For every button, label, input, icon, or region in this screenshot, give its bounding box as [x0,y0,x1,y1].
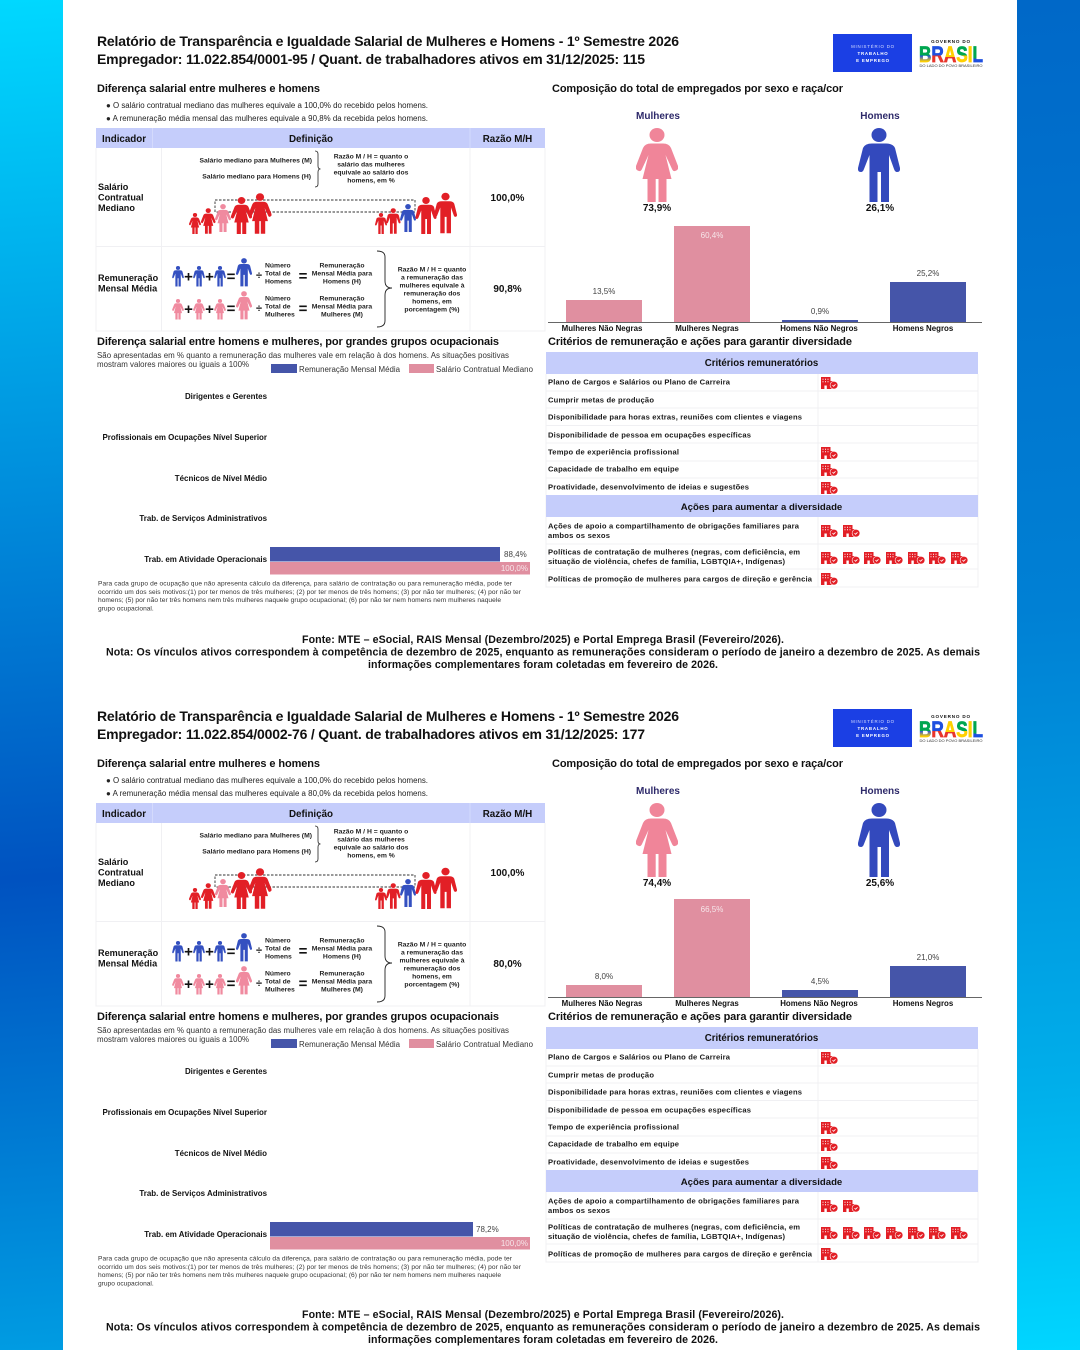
row: remuneração mensal média: Remuneração [320,938,364,944]
row: remuneração mensal média: Mulheres (M) [321,986,363,994]
legend: Remuneração Mensal Média [299,365,401,374]
title: Relatório de Transparência e Igualdade Salarial de Mulheres e Homens - 1º Semestre 2026 [97,708,679,724]
source note: Nota: Os vínculos ativos correspondem à competência de dezembro de 2025, enquanto as remunerações consideram o período de janeiro a dezembro de 2025. As demais [106,646,980,658]
table header: Razão M/H [483,809,532,820]
action rows [548,522,968,585]
heading: occupational groups: Diferença salarial entre homens e mulheres, por grandes grupos ocupacionais [97,336,499,348]
row: remuneração mensal média: Remuneração [320,262,364,270]
heading: occupational groups: Diferença salarial entre homens e mulheres, por grandes grupos ocupacionais [97,1011,499,1023]
row: remuneração mensal média: Homens [265,278,292,286]
panel: indicator table [96,803,545,1006]
table header [96,803,545,823]
source note [106,1309,980,1346]
footnote: homens; (5) por não ter três homens nem três mulheres naquele grupo ocupacional; (6) por não ter nem homens nem mulheres naquele [98,1272,501,1279]
row: remuneração mensal média: Razão M / H = quanto [398,941,466,948]
summary bullets: ● O salário contratual mediano das mulheres equivale a 100,0% do recebido pelos homens. [106,776,428,785]
panel: composition icons: Mulheres [636,111,680,122]
action rows: ambos os sexos [548,531,610,540]
bar chart: sex and race: Mulheres Negras [675,999,739,1008]
row: remuneração mensal média: Remuneração [320,970,364,978]
panel: composition icons: 74,4% [643,878,671,889]
footnote: homens; (5) por não ter três homens nem três mulheres naquele grupo ocupacional; (6) por não ter nem homens nem mulheres naquele [98,597,501,604]
criteria rows: Disponibilidade para horas extras, reuniões com clientes e viagens [548,1088,802,1096]
row: remuneração mensal média: = [299,300,308,318]
row: remuneração mensal média: Mensal Média para [312,946,372,952]
occupation bar chart: 88,4% [504,550,527,559]
icon: man [858,128,900,202]
panel: composition icons: 73,9% [643,203,671,214]
criteria rows [548,1052,838,1169]
row: remuneração mensal média: Número [265,262,291,270]
table header: Definição [289,809,333,820]
bar chart: sex and race: 25,2% [917,269,939,278]
bar chart: sex and race: Homens Não Negros [780,999,858,1008]
title: Relatório de Transparência e Igualdade Salarial de Mulheres e Homens - 1º Semestre 2026 [97,33,679,49]
table header [96,128,545,148]
footnote: Para cada grupo de ocupação que não apresenta cálculo da diferença, para salário de contratação ou para remuneração média, pode ter [98,580,513,588]
occupation bar chart: 78,2% [476,1225,499,1234]
bar chart: sex and race: 0,9% [811,307,829,316]
panel: criteria table [546,352,978,587]
row: salário contratual mediano [98,151,525,234]
summary bullets [106,101,428,123]
table header: Razão M/H [483,134,532,145]
table header: Indicador [102,809,146,820]
logo: ministério: TRABALHO [857,726,889,731]
row: remuneração mensal média: Homens [265,954,292,960]
bar chart: sex and race: Mulheres Negras [675,324,739,333]
criteria rows: Disponibilidade de pessoa em ocupações específicas [548,1106,751,1114]
header: ações [546,495,978,517]
row: remuneração mensal média: = [227,944,236,960]
row: salário contratual mediano: Salário mediano para Homens (H) [202,848,311,856]
title: Empregador: 11.022.854/0002-76 / Quant. de trabalhadores ativos em 31/12/2025: 177 [97,726,645,742]
row: remuneração mensal média: a remuneração das [401,274,463,281]
row: remuneração mensal média: Mensal Média [98,284,158,294]
occupation bar chart: Dirigentes e Gerentes [185,392,268,401]
heading: criteria: Critérios de remuneração e ações para garantir diversidade [548,336,852,348]
row: remuneração mensal média: remuneração dos [404,290,461,297]
action rows: situação de violência, chefes de família, LGBTQIA+, Indígenas) [548,1232,785,1241]
criteria rows: Cumprir metas de produção [548,1070,654,1080]
logo: ministério [833,709,912,747]
row: remuneração mensal média: Remuneração [320,296,364,302]
panel: composition icons: 25,6% [866,878,894,889]
action rows: ambos os sexos [548,1206,610,1215]
left gradient band [0,0,63,1350]
occupation bar chart: Trab. de Serviços Administrativos [139,1189,268,1198]
logo: governo do brasil: GOVERNO DO [931,39,971,44]
panel: indicator table [96,128,545,331]
summary bullets: ● A remuneração média mensal das mulheres equivale a 80,0% da recebida pelos homens. [106,789,428,798]
action rows: Políticas de promoção de mulheres para cargos de direção e gerência [548,574,813,584]
criteria rows: Cumprir metas de produção [548,396,654,404]
icon: woman [636,803,678,877]
criteria rows: Plano de Cargos e Salários ou Plano de Carreira [548,1052,731,1062]
row: remuneração mensal média: Número [265,296,291,302]
row: remuneração mensal média: Mensal Média para [312,270,372,278]
row: remuneração mensal média: + [184,944,193,960]
footnote [98,1256,522,1288]
row: salário contratual mediano: homens, em % [347,852,395,860]
title [97,708,679,742]
row: remuneração mensal média: homens, em [412,298,452,305]
occupation bar chart [102,1067,530,1250]
row: salário contratual mediano: 100,0% [491,868,525,879]
panel: criteria table [546,1027,978,1262]
source note [106,634,980,671]
source note: Nota: Os vínculos ativos correspondem à competência de dezembro de 2025, enquanto as remunerações consideram o período de janeiro a dezembro de 2025. As demais [106,1322,980,1334]
row: remuneração mensal média: + [184,268,193,286]
row: remuneração mensal média: = [227,300,236,318]
row: salário contratual mediano: Salário mediano para Homens (H) [202,174,311,180]
row: remuneração mensal média: + [205,268,214,286]
row: remuneração mensal média: Número [265,938,291,944]
row: remuneração mensal média: + [205,301,214,318]
occupation bar chart: Trab. em Atividade Operacionais [144,1230,268,1239]
row: remuneração mensal média [98,251,522,327]
panel: composition icons: Mulheres [636,786,680,797]
row: remuneração mensal média: = [299,943,308,960]
row: remuneração mensal média: Homens (H) [323,278,361,286]
heading: criteria: Critérios de remuneração e ações para garantir diversidade [548,1011,852,1023]
legend [271,364,534,374]
occupation bar chart: Técnicos de Nível Médio [175,474,267,483]
row: remuneração mensal média: Mensal Média para [312,978,372,986]
action rows: situação de violência, chefes de família, LGBTQIA+, Indígenas) [548,557,785,566]
row: salário contratual mediano: Contratual [98,192,143,202]
row: salário contratual mediano: equivale ao salário dos [334,170,409,176]
occupational note: mostram valores maiores ou iguais a 100% [97,1035,249,1044]
footnote: grupo ocupacional. [98,1280,154,1288]
occupational note: São apresentadas em % quanto a remuneração das mulheres vale em relação à dos homens. As situações positivas [97,351,509,360]
row: remuneração mensal média: Total de [265,304,291,310]
row: remuneração mensal média: mulheres equivale à [400,282,465,289]
title: Empregador: 11.022.854/0001-95 / Quant. de trabalhadores ativos em 31/12/2025: 115 [97,51,645,67]
row: salário contratual mediano: 100,0% [491,193,525,204]
icon: man [858,803,900,877]
bar chart: sex and race: 13,5% [593,287,615,296]
header: ações: Ações para aumentar a diversidade [681,502,842,513]
bar chart: sex and race: Homens Negros [893,324,954,333]
bar chart: sex and race: Homens Negros [893,999,954,1008]
footnote: grupo ocupacional. [98,606,154,612]
panel: composition icons: 26,1% [866,203,894,214]
action rows: Políticas de promoção de mulheres para cargos de direção e gerência [548,1250,813,1258]
source note: informações complementares foram coletadas em fevereiro de 2026. [368,1334,718,1346]
occupation bar chart: Dirigentes e Gerentes [185,1067,268,1076]
header: critérios [546,1027,978,1049]
logo: governo do brasil: DO LADO DO POVO BRASILEIRO [920,63,982,68]
legend: Remuneração Mensal Média [299,1040,401,1049]
row: salário contratual mediano: salário das mulheres [337,836,405,844]
occupation bar chart: Profissionais em Ocupações Nível Superior [102,1108,267,1117]
bar chart: sex and race: 21,0% [917,953,939,962]
row: remuneração mensal média: remuneração dos [404,965,461,972]
row: remuneração mensal média: porcentagem (%) [404,306,460,313]
bar chart: sex and race: 66,5% [701,905,723,914]
row: remuneração mensal média: = [299,976,308,992]
panel: composition icons [636,786,900,889]
row: salário contratual mediano: Salário mediano para Mulheres (M) [199,158,312,164]
row: remuneração mensal média: mulheres equivale à [400,957,465,964]
panel: composition icons [636,111,900,214]
action rows: Ações de apoio a compartilhamento de obrigações familiares para [548,522,800,530]
criteria rows: Plano de Cargos e Salários ou Plano de Carreira [548,378,731,386]
logo: governo do brasil: BRASIL [919,717,983,742]
row: remuneração mensal média [98,926,522,1002]
criteria rows: Proatividade, desenvolvimento de ideias e sugestões [548,482,749,492]
action rows: Políticas de contratação de mulheres (negras, com deficiência, em [548,548,800,556]
row: remuneração mensal média: Razão M / H = quanto [398,266,466,273]
occupation bar chart [102,392,530,574]
row: salário contratual mediano: homens, em % [347,178,395,184]
source note: Fonte: MTE – eSocial, RAIS Mensal (Dezembro/2025) e Portal Emprega Brasil (Fevereiro/2026). [302,1309,784,1321]
heading: composição: Composição do total de empregados por sexo e raça/cor [552,83,844,95]
title [97,33,679,67]
logo: governo do brasil: DO LADO DO POVO BRASILEIRO [920,738,982,743]
row: remuneração mensal média: = [227,268,236,286]
icon: woman [636,128,678,202]
footnote: ocorrido um dos seis motivos:(1) por ter menos de três mulheres; (2) por ter menos de três homens; (3) por não ter mulheres; (4) por não ter [98,589,522,596]
criteria rows: Disponibilidade de pessoa em ocupações específicas [548,430,751,440]
action rows [548,1196,968,1260]
occupation bar chart: 100,0% [501,564,528,573]
row: remuneração mensal média: Mulheres (M) [321,312,363,318]
occupational note [97,1026,509,1044]
logo: ministério: MINISTÉRIO DO [851,44,895,49]
report block 1: 0001-95 [96,33,983,671]
row: remuneração mensal média: = [227,976,236,992]
header: critérios [546,352,978,374]
action rows: Ações de apoio a compartilhamento de obrigações familiares para [548,1196,800,1206]
row: remuneração mensal média: Total de [265,270,291,278]
bar chart: sex and race: 8,0% [595,972,613,981]
logo: governo do brasil: GOVERNO DO [931,714,971,719]
footnote: ocorrido um dos seis motivos:(1) por ter menos de três mulheres; (2) por ter menos de três homens; (3) por não ter mulheres; (4) por não ter [98,1264,522,1271]
row: remuneração mensal média: porcentagem (%) [404,981,460,988]
legend: Salário Contratual Mediano [436,365,534,374]
row: remuneração mensal média: ÷ [256,303,262,315]
row: remuneração mensal média: Mensal Média [98,958,158,968]
criteria rows: Disponibilidade para horas extras, reuniões com clientes e viagens [548,412,802,422]
row: remuneração mensal média: a remuneração das [401,949,463,956]
header: ações [546,1170,978,1192]
criteria rows [548,377,838,494]
row: remuneração mensal média: ÷ [256,270,262,282]
report block 2: 0002-76 [96,708,983,1346]
panel: composition icons: Homens [860,111,900,122]
row: remuneração mensal média: + [205,976,214,993]
row: remuneração mensal média: + [205,944,214,960]
row: remuneração mensal média: Homens (H) [323,954,361,960]
heading: diferença salarial: Diferença salarial entre mulheres e homens [97,758,320,770]
logo: ministério: E EMPREGO [856,733,890,738]
source note: Fonte: MTE – eSocial, RAIS Mensal (Dezembro/2025) e Portal Emprega Brasil (Fevereiro/2026). [302,634,784,646]
heading: diferença salarial: Diferença salarial entre mulheres e homens [97,83,320,95]
bar chart: sex and race: 4,5% [811,977,829,986]
row: salário contratual mediano: salário das mulheres [337,162,405,168]
row: salário contratual mediano: Contratual [98,868,143,878]
row: remuneração mensal média: Remuneração [98,273,159,283]
action rows: Políticas de contratação de mulheres (negras, com deficiência, em [548,1222,800,1232]
logo: ministério: TRABALHO [857,51,889,56]
source note: informações complementares foram coletadas em fevereiro de 2026. [368,659,718,671]
row: remuneração mensal média: Número [265,970,291,978]
row: remuneração mensal média: Mulheres [265,312,295,318]
occupational note: São apresentadas em % quanto a remuneração das mulheres vale em relação à dos homens. As situações positivas [97,1026,509,1035]
row: salário contratual mediano: Razão M / H = quanto o [334,154,408,160]
header: ações: Ações para aumentar a diversidade [681,1177,842,1188]
row: remuneração mensal média: 90,8% [493,284,522,295]
summary bullets [106,776,428,798]
table header: Indicador [102,134,146,145]
row: remuneração mensal média: Mensal Média para [312,304,372,310]
row: salário contratual mediano: Salário [98,857,129,867]
panel: composition icons: Homens [860,786,900,797]
criteria rows: Capacidade de trabalho em equipe [548,464,679,474]
row: salário contratual mediano [98,826,525,909]
row: salário contratual mediano: Salário [98,182,129,192]
logo: governo do brasil: BRASIL [919,42,983,67]
row: remuneração mensal média: Total de [265,946,291,952]
bar chart: sex and race: Mulheres Não Negras [562,999,643,1008]
footnote: Para cada grupo de ocupação que não apresenta cálculo da diferença, para salário de contratação ou para remuneração média, pode ter [98,1256,513,1262]
row: remuneração mensal média: = [299,268,308,285]
occupation bar chart: Técnicos de Nível Médio [175,1149,267,1158]
bar chart: sex and race: 60,4% [701,231,723,240]
row: remuneração mensal média: ÷ [256,978,262,990]
row: salário contratual mediano: Mediano [98,878,135,888]
row: remuneração mensal média: Mulheres [265,986,295,994]
row: salário contratual mediano: Mediano [98,203,135,213]
row: remuneração mensal média: Total de [265,978,291,986]
summary bullets: ● A remuneração média mensal das mulheres equivale a 90,8% da recebida pelos homens. [106,114,428,123]
row: remuneração mensal média: Remuneração [98,948,159,958]
bar chart: sex and race [548,226,982,333]
occupation bar chart: Trab. em Atividade Operacionais [144,555,268,564]
logo: ministério: E EMPREGO [856,58,890,63]
row: remuneração mensal média: + [184,301,193,318]
bar chart: sex and race: Mulheres Não Negras [562,324,643,333]
occupational note [97,351,509,369]
right gradient band [1017,0,1080,1350]
criteria rows: Tempo de experiência profissional [548,1122,679,1132]
legend: Salário Contratual Mediano [436,1040,534,1049]
table header: Definição [289,134,333,145]
row: salário contratual mediano: Salário mediano para Mulheres (M) [199,832,312,840]
summary bullets: ● O salário contratual mediano das mulheres equivale a 100,0% do recebido pelos homens. [106,101,428,110]
bar chart: sex and race [548,899,982,1008]
criteria rows: Capacidade de trabalho em equipe [548,1140,679,1148]
heading: composição: Composição do total de empregados por sexo e raça/cor [552,758,844,770]
footnote [98,580,522,612]
legend [271,1039,534,1049]
row: remuneração mensal média: + [184,976,193,993]
row: salário contratual mediano: equivale ao salário dos [334,844,409,852]
row: remuneração mensal média: 80,0% [493,959,522,970]
occupation bar chart: Profissionais em Ocupações Nível Superior [102,433,267,442]
header: critérios: Critérios remuneratórios [705,358,818,369]
occupation bar chart: Trab. de Serviços Administrativos [139,514,268,523]
row: remuneração mensal média: ÷ [256,945,262,957]
occupation bar chart: 100,0% [501,1239,528,1248]
row: remuneração mensal média: homens, em [412,973,452,980]
criteria rows: Proatividade, desenvolvimento de ideias e sugestões [548,1158,749,1166]
header: critérios: Critérios remuneratórios [705,1033,818,1044]
logo: ministério: MINISTÉRIO DO [851,719,895,724]
occupational note: mostram valores maiores ou iguais a 100% [97,360,249,369]
bar chart: sex and race: Homens Não Negros [780,324,858,333]
criteria rows: Tempo de experiência profissional [548,448,679,456]
row: salário contratual mediano: Razão M / H = quanto o [334,828,408,836]
logo: ministério [833,34,912,72]
